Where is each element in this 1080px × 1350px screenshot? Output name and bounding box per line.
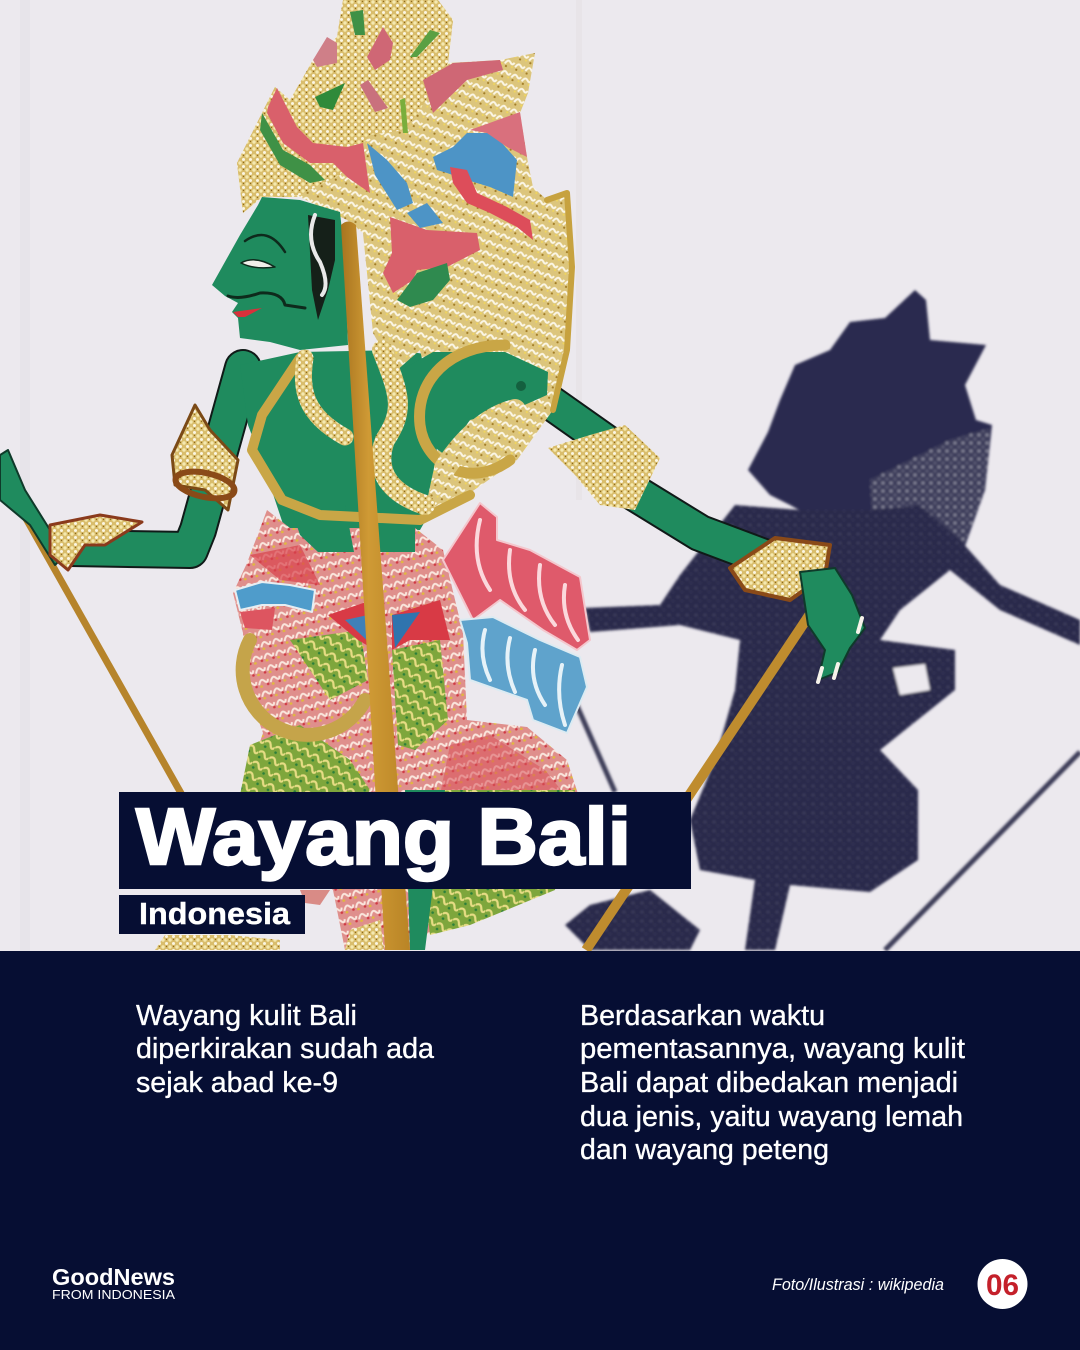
puppet: left arm	[0, 368, 243, 570]
shadow of the puppet on the screen	[565, 290, 1080, 950]
text block: right: Berdasarkan waktu	[580, 1000, 825, 1032]
puppet: shoulder dot	[516, 381, 526, 391]
pink and red flower	[383, 217, 480, 293]
text block: left: diperkirakan sudah ada	[136, 1033, 435, 1065]
shadow: sticks	[570, 690, 1080, 950]
puppet: right arm	[540, 395, 865, 682]
text block: right	[580, 1000, 965, 1166]
puppet: red hair tassel	[443, 503, 590, 650]
crown rim	[547, 193, 572, 410]
text block: right: Bali dapat dibedakan menjadi	[580, 1067, 958, 1099]
finger nails	[818, 618, 862, 682]
puppet: skirt	[155, 505, 580, 950]
wrist cuff	[730, 538, 830, 600]
text block: left	[136, 1000, 435, 1099]
eye	[241, 260, 275, 268]
text block: right: dua jenis, yaitu wayang lemah	[580, 1101, 963, 1133]
moustache	[228, 293, 305, 308]
green panels on skirt	[240, 725, 370, 830]
photo credit: Foto/Ilustrasi : wikipedia	[772, 1276, 944, 1294]
shadow: lower hand	[565, 890, 700, 950]
shadow: body and skirt	[585, 505, 1080, 950]
blue sash knot	[235, 582, 315, 612]
lower green cloth	[405, 790, 445, 950]
hand with fingers	[0, 450, 70, 565]
right control stick	[586, 578, 834, 950]
red skirt accents	[440, 735, 565, 795]
arm cuff	[548, 425, 660, 510]
right hand	[800, 568, 865, 680]
blue ornament	[433, 133, 517, 197]
title: Wayang Bali	[136, 792, 631, 881]
torso green gap panels	[290, 505, 354, 552]
ear ornament	[311, 215, 326, 295]
wayang puppet figure	[0, 0, 865, 950]
title bar	[119, 792, 691, 889]
puppet: chest collar and necklace	[252, 345, 515, 520]
subtitle bar	[119, 895, 305, 934]
shadow: headdress	[748, 290, 992, 610]
pink and green band	[267, 88, 370, 193]
subtitle: Indonesia	[139, 896, 291, 931]
page number badge	[978, 1259, 1028, 1309]
puppet: blue hair tassel	[460, 617, 587, 733]
puppet: central stick	[341, 222, 410, 950]
upper arm bracelet	[172, 405, 238, 510]
puppet: face	[212, 197, 348, 350]
text block: left: sejak abad ke-9	[136, 1067, 338, 1099]
page number badge: 06	[986, 1269, 1019, 1302]
gold arc belt	[243, 640, 365, 735]
puppet: torso	[240, 350, 440, 530]
text block: left: Wayang kulit Bali	[136, 1000, 357, 1032]
puppet: right shoulder	[405, 352, 548, 455]
blue centre ornaments	[367, 143, 413, 210]
text block: right: dan wayang peteng	[580, 1134, 829, 1166]
bottom panel	[0, 951, 1080, 1350]
puppet: headdress	[237, 0, 572, 510]
left control stick	[24, 515, 182, 795]
hair	[308, 215, 335, 320]
logo: GoodNews from Indonesia: GoodNews	[52, 1264, 175, 1290]
shadow: hole between skirt parts	[893, 664, 930, 695]
wrist bracelet	[50, 515, 142, 570]
photo: cloth screen background	[0, 0, 1080, 951]
small foot pieces	[155, 935, 280, 950]
text block: right: pementasannya, wayang kulit	[580, 1033, 965, 1065]
shadow: lattice crown detail	[870, 428, 990, 600]
logo: GoodNews from Indonesia: FROM INDONESIA	[52, 1288, 176, 1302]
lips	[233, 308, 262, 317]
logo: GoodNews from Indonesia	[52, 1264, 176, 1302]
top ornaments	[313, 37, 337, 67]
red and blue triangles	[328, 600, 375, 650]
eyebrow	[245, 235, 285, 252]
